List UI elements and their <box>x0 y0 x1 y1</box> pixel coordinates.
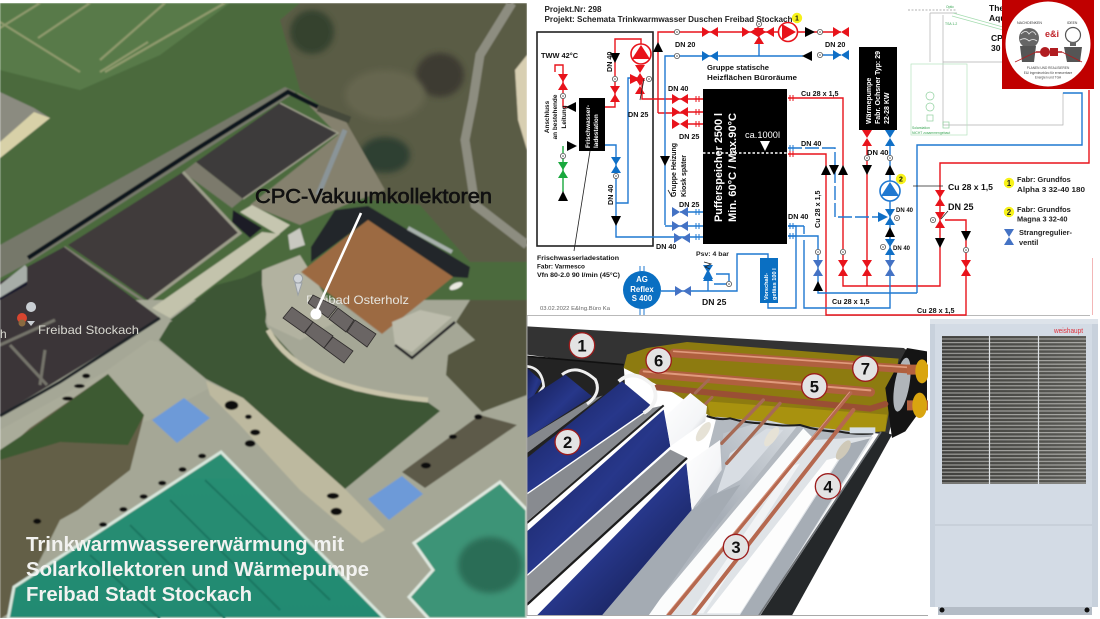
label connection to existing pipe: Leitung <box>561 105 568 129</box>
project heading: Projekt.Nr: 298 <box>544 5 602 14</box>
brand: weishaupt <box>1053 326 1083 335</box>
panel: aerial photo of Freibad Stockach <box>0 3 527 619</box>
reflector troughs <box>640 416 873 615</box>
date stamp: 03.02.2022 E&Ing.Büro Ka <box>540 306 610 312</box>
safety valve <box>696 251 729 279</box>
freshwater station frame <box>537 32 653 246</box>
logo: E&I Ingenieurbüro: e&i <box>1045 29 1059 39</box>
tubes <box>528 368 542 400</box>
label connection to existing pipe: Anschluss <box>544 100 551 133</box>
leader lines <box>574 79 948 251</box>
pipe dimension labels: DN 25 <box>948 202 974 212</box>
panel: CPC vacuum collector cutaway: 6 <box>654 351 663 370</box>
label freshwater station <box>537 255 620 279</box>
legend <box>1004 175 1085 247</box>
map pin and label: Freibad Stockach: Freibad Stockach <box>38 323 139 337</box>
thin solar station sketch: NICHT zusammengebaut <box>912 131 950 135</box>
callout label: CPC-Vakuumkollektoren: CPC-Vakuumkollektoren <box>255 186 492 208</box>
pre-switching vessel <box>760 258 778 303</box>
callout leader line <box>310 213 361 320</box>
pipe dimension labels: Cu 28 x 1,5 <box>948 182 993 192</box>
title: Trinkwarmwassererwärmung mit <box>26 534 344 556</box>
expansion vessel: Reflex <box>630 285 654 294</box>
legend: Alpha 3 32-40 180 <box>1017 185 1085 194</box>
pipe dimension labels: Cu 28 x 1,5 <box>832 297 870 306</box>
pipe dimension labels: Cu 28 x 1,5 <box>813 190 822 228</box>
map pin and label: Freibad Stockach <box>0 302 139 341</box>
circulation pumps <box>631 22 900 201</box>
pipe dimension labels: DN 25 <box>679 200 699 209</box>
logo: E&I Ingenieurbüro: PLANEN UND REALISIEREN <box>1027 66 1070 70</box>
panel: hydraulic schematic <box>527 0 1100 316</box>
storage tank <box>703 89 787 244</box>
pump number badges: 1 <box>795 16 799 22</box>
blue valves <box>611 50 895 281</box>
title: Solarkollektoren und Wärmepumpe <box>26 559 369 581</box>
pipe dimension labels: DN 40 <box>788 212 808 221</box>
label freshwater station: Fabr: Varmesco <box>537 264 585 270</box>
clipped heading text: Aqu <box>989 13 1006 23</box>
pipe dimension labels: DN 40 <box>656 242 676 251</box>
label static heating group: Heizflächen Büroräume <box>707 73 797 82</box>
panel: CPC vacuum collector cutaway: 7 <box>861 360 870 379</box>
legend: Fabr: Grundfos <box>1017 205 1071 214</box>
pipe dimension labels: Cu 28 x 1,5 <box>801 89 839 98</box>
panel: CPC vacuum collector cutaway: 4 <box>823 477 833 496</box>
gauges <box>560 21 969 287</box>
black flow arrows <box>558 27 971 291</box>
label heating group kiosk: Gruppe Heizung <box>671 143 678 197</box>
red valves <box>558 27 971 276</box>
label TWW 42°C: TWW 42°C <box>541 51 579 60</box>
map pin and label: Freibad Osterholz <box>294 274 409 307</box>
project heading: Projekt: Schemata Trinkwarmwasser Duschen Freibad Stockach <box>544 15 793 24</box>
pipe dimension labels: DN 40 <box>606 185 615 205</box>
pre-switching vessel: gefäss 100 l <box>772 268 778 300</box>
map pin and label: Freibad Osterholz: Freibad Osterholz <box>306 293 409 307</box>
pre-switching vessel: Vorschalt- <box>764 273 770 300</box>
legend: Strangregulier- <box>1019 228 1073 237</box>
panel border line <box>527 316 930 616</box>
pipe tick marks <box>696 95 793 240</box>
clipped heading text: 30 <box>991 43 1001 53</box>
logo: E&I Ingenieurbüro <box>1002 0 1094 89</box>
panel: CPC vacuum collector cutaway: 2 <box>563 433 572 452</box>
freshwater station unit: ladestation <box>593 114 600 148</box>
label heating group kiosk <box>671 143 688 197</box>
safety valve: Psv: 4 bar <box>696 251 729 258</box>
green pipe <box>562 146 564 192</box>
expansion vessel: S 400 <box>632 294 653 303</box>
pipe dimension labels: DN 25 <box>679 132 699 141</box>
project heading <box>544 5 793 24</box>
label static heating group: Gruppe statische <box>707 63 769 72</box>
clipped heading text <box>989 3 1006 53</box>
pump number badges: 2 <box>899 176 903 184</box>
label heating group kiosk: Kiosk später <box>681 155 688 197</box>
label connection to existing pipe: an bestehende <box>552 94 559 139</box>
grey trough below lowest tube <box>602 485 740 615</box>
title <box>26 534 369 606</box>
expansion vessel: AG <box>636 275 648 284</box>
solar collector field on map <box>283 295 376 363</box>
grille <box>942 336 1086 484</box>
thin solar station sketch: Solarstation <box>912 126 930 130</box>
legend: Fabr: Grundfos <box>1017 175 1071 184</box>
pipe dimension labels <box>605 40 993 315</box>
pipe dimension labels: Cu 28 x 1,5 <box>917 306 955 315</box>
pipe dimension labels: DN 40 <box>668 84 688 93</box>
fittings <box>907 370 930 405</box>
logo: E&I Ingenieurbüro: Energien und TGA <box>1035 76 1062 80</box>
panel: CPC vacuum collector cutaway: 3 <box>731 538 741 557</box>
logo: E&I Ingenieurbüro: IDEEN <box>1067 21 1078 25</box>
label connection to existing pipe <box>544 94 568 139</box>
feet <box>940 608 1090 612</box>
panel: CPC vacuum collector cutaway <box>527 318 930 615</box>
pipe dimension labels: DN 40 <box>867 148 889 157</box>
heat pump block: Fabr. Ochsner Typ: 29 <box>875 51 882 124</box>
thin solar station sketch <box>908 5 1082 135</box>
pipe dimension labels: DN 20 <box>825 40 845 49</box>
blue covers <box>152 398 210 443</box>
pump number badges <box>792 13 906 184</box>
logo: E&I Ingenieurbüro: NACHDENKEN <box>1017 21 1043 25</box>
legend: Magna 3 32-40 <box>1017 214 1068 224</box>
freshwater station unit <box>579 98 605 151</box>
red pipes <box>555 32 1089 315</box>
logo: E&I Ingenieurbüro: E&I Ingenieurbüro für erneuerbare <box>1024 71 1072 75</box>
blue pipes <box>605 32 1082 308</box>
pipe dimension labels: DN 25 <box>702 297 727 307</box>
map pin and label: Freibad Stockach: h <box>0 327 7 341</box>
storage tank: Min. 60°C / Max.90°C <box>727 113 739 222</box>
panel: CPC vacuum collector cutaway: 5 <box>810 377 819 396</box>
heat pump block: Wärmepumpe <box>866 78 873 124</box>
expansion vessel <box>623 266 661 315</box>
end bracket <box>885 348 927 438</box>
label freshwater station: Frischwasserladestation <box>537 255 619 262</box>
pipe dimension labels: DN 40 <box>896 208 914 214</box>
legend: ventil <box>1019 238 1038 247</box>
thin solar station sketch: Optic <box>946 5 954 9</box>
legend: 1 <box>1007 179 1012 188</box>
freshwater station unit: Frischwasser- <box>585 105 592 148</box>
thin solar station sketch: TSA 1-2 <box>945 22 957 26</box>
panel: heat pump unit <box>928 319 1100 619</box>
clipped heading text: CP <box>991 33 1003 43</box>
storage tank: Pufferspeicher 2500 l <box>713 113 725 222</box>
heat pump block: 22-28 KW <box>884 92 891 124</box>
pipe dimension labels: DN 40 <box>801 139 821 148</box>
clipped heading text: The <box>989 3 1004 13</box>
label freshwater station: Vfn 80-2.0 90 l/min (45°C) <box>537 271 620 279</box>
pipe dimension labels: DN 40 <box>893 246 911 252</box>
number markers <box>555 333 878 560</box>
legend: 2 <box>1007 208 1012 217</box>
pipe dimension labels: DN 25 <box>628 110 648 119</box>
pipe dimension labels: DN 40 <box>605 52 614 72</box>
storage tank: ca.1000l <box>745 130 780 141</box>
label static heating group <box>707 63 797 82</box>
green valve <box>558 162 568 178</box>
panel: CPC vacuum collector cutaway: 1 <box>577 336 587 355</box>
title: Freibad Stadt Stockach <box>26 584 252 606</box>
pipe dimension labels: DN 20 <box>675 40 695 49</box>
heat pump block <box>859 47 897 130</box>
